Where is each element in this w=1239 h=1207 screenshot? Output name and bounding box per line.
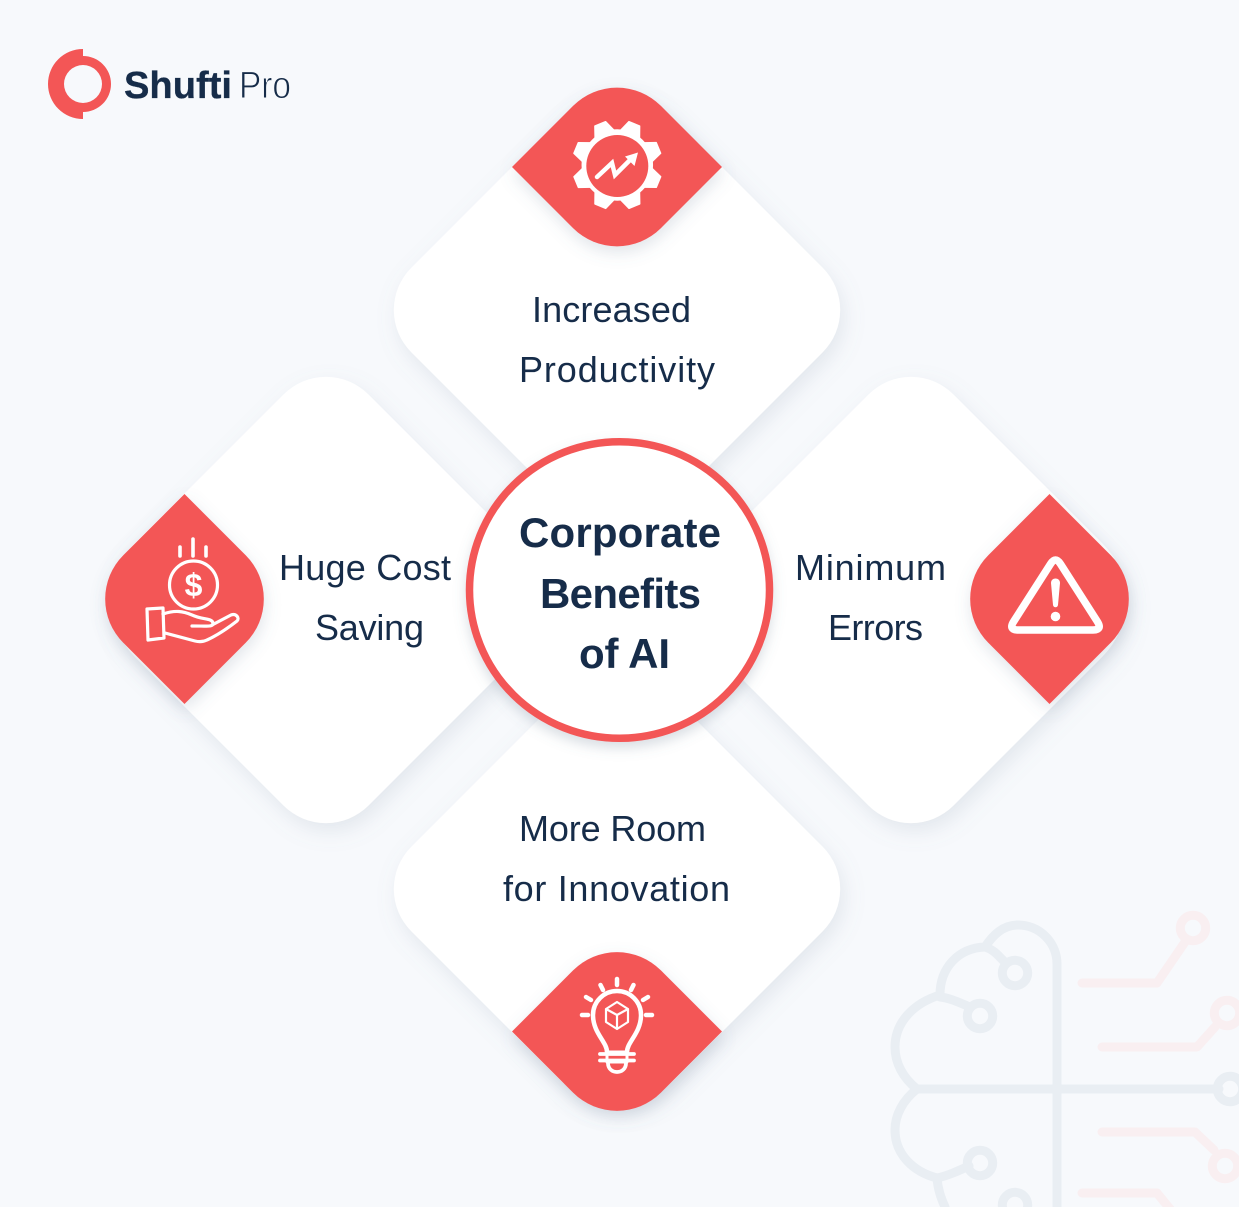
card: top diamond [394, 95, 840, 533]
icon: warning triangle [1012, 560, 1099, 630]
label: increased productivity [519, 289, 715, 390]
panel: increased productivity [394, 88, 840, 533]
panel: huge cost saving [105, 377, 549, 823]
decorative brain circuit [895, 915, 1239, 1207]
label: increased productivity: Productivity [519, 349, 715, 390]
logo: Shufti Pro [48, 49, 291, 119]
logo ring mark [48, 49, 111, 119]
icon: gear with growth arrow [572, 120, 662, 210]
badge: left red leaf [105, 494, 264, 704]
label: more room for innovation: More Room [519, 808, 706, 849]
card: bottom diamond [394, 666, 840, 1104]
label: more room for innovation [503, 808, 730, 909]
label: minimum errors [795, 547, 946, 648]
badge: top red leaf [512, 88, 722, 246]
panel: more room for innovation [394, 666, 840, 1111]
card: left diamond [111, 377, 549, 823]
logo wordmark: Shufti [124, 65, 232, 107]
label: huge cost saving: Huge Cost [279, 547, 451, 588]
label: minimum errors: Minimum [795, 547, 946, 588]
title: corporate benefits of AI: Benefits [540, 570, 701, 617]
icon: hand with dollar coin [147, 539, 238, 642]
title: corporate benefits of AI: of AI [579, 630, 670, 677]
label: huge cost saving: Saving [315, 607, 424, 648]
label: huge cost saving [279, 547, 451, 648]
title: corporate benefits of AI: Corporate [519, 509, 721, 556]
panel: minimum errors [688, 377, 1129, 823]
center circle [470, 442, 770, 738]
label: increased productivity: Increased [532, 289, 691, 330]
badge: bottom red leaf [512, 952, 722, 1111]
badge: right red leaf [970, 494, 1129, 704]
label: more room for innovation: for Innovation [503, 868, 730, 909]
ring [470, 442, 770, 738]
icon: light bulb with cube [582, 979, 652, 1072]
card: right diamond [688, 377, 1126, 823]
logo wordmark: Pro [239, 65, 291, 107]
label: minimum errors: Errors [828, 607, 923, 648]
title: corporate benefits of AI [519, 509, 721, 677]
icon: hand with dollar coin: $ [185, 567, 203, 603]
